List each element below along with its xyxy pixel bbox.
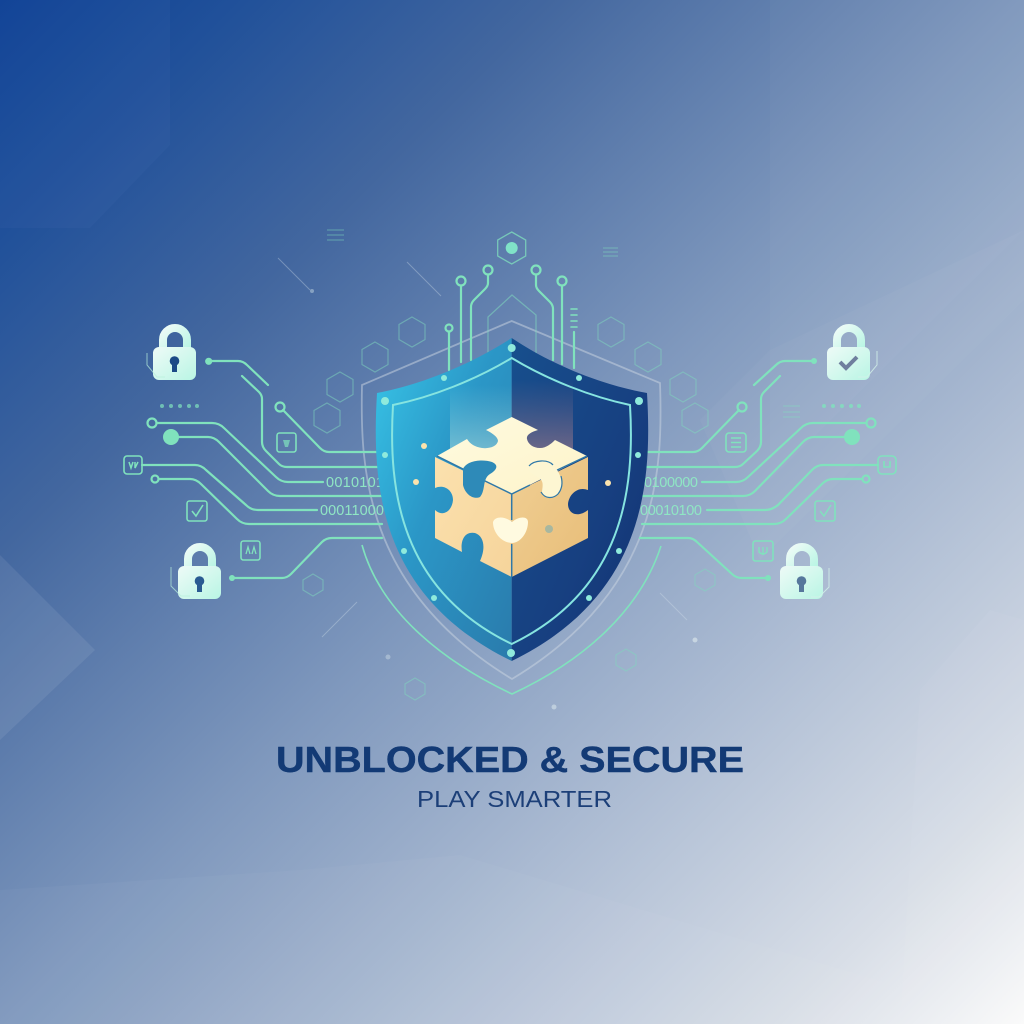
thin diagonal marks and dots — [278, 258, 698, 710]
icon: right glyph box — [878, 456, 896, 474]
icon: left glyph box — [124, 456, 142, 474]
cube right face — [512, 457, 588, 577]
icon: padlock bottom right — [780, 547, 829, 599]
binary text right lower: 00010100 — [640, 503, 702, 519]
icon: left shield box — [277, 433, 296, 452]
grey dot — [545, 525, 553, 533]
icon: lower left box — [241, 541, 260, 560]
shield right half — [512, 338, 648, 661]
grey outer shield outline — [362, 321, 661, 679]
raised puzzle tab — [529, 461, 562, 498]
binary text left lower: 00011000 — [320, 503, 384, 519]
cube edges — [437, 456, 587, 577]
outline hexagons — [303, 317, 715, 700]
subtitle: PLAY SMARTER — [417, 786, 612, 812]
faint decorative hexagons and marks — [278, 230, 800, 710]
icon: left check box — [187, 501, 207, 521]
shield inner line — [392, 358, 631, 644]
inner house outline — [488, 295, 536, 360]
icon: right check box — [815, 501, 835, 521]
glow panels behind cube — [450, 380, 573, 455]
shield left half — [376, 338, 512, 661]
binary text right: 0100000 — [644, 475, 698, 491]
icon: lower right box — [753, 541, 773, 561]
shield — [376, 338, 648, 661]
green outer shield arc — [362, 545, 661, 694]
puzzle cube — [435, 417, 588, 577]
icon: padlock bottom left — [171, 547, 221, 599]
cube left face — [435, 457, 512, 577]
left circuit traces — [142, 359, 384, 581]
cream sparkles — [413, 443, 611, 486]
icon: padlock with check top right — [827, 328, 877, 380]
top circuit traces — [446, 266, 577, 370]
node dots — [765, 358, 861, 581]
title: UNBLOCKED & SECURE — [276, 739, 744, 780]
binary text left: 0010101 — [326, 475, 384, 491]
icon: padlock top left — [147, 328, 196, 380]
top hexagon node — [498, 232, 526, 264]
shield rivets — [381, 344, 643, 657]
puzzle notch on top face — [463, 460, 496, 498]
small menu glyphs — [327, 230, 800, 417]
icon: right list box — [726, 433, 746, 452]
node dots — [160, 404, 235, 581]
cube top face — [437, 417, 587, 494]
small icon boxes — [124, 433, 896, 561]
right circuit traces — [640, 358, 878, 581]
heart shaped tab — [493, 518, 528, 543]
